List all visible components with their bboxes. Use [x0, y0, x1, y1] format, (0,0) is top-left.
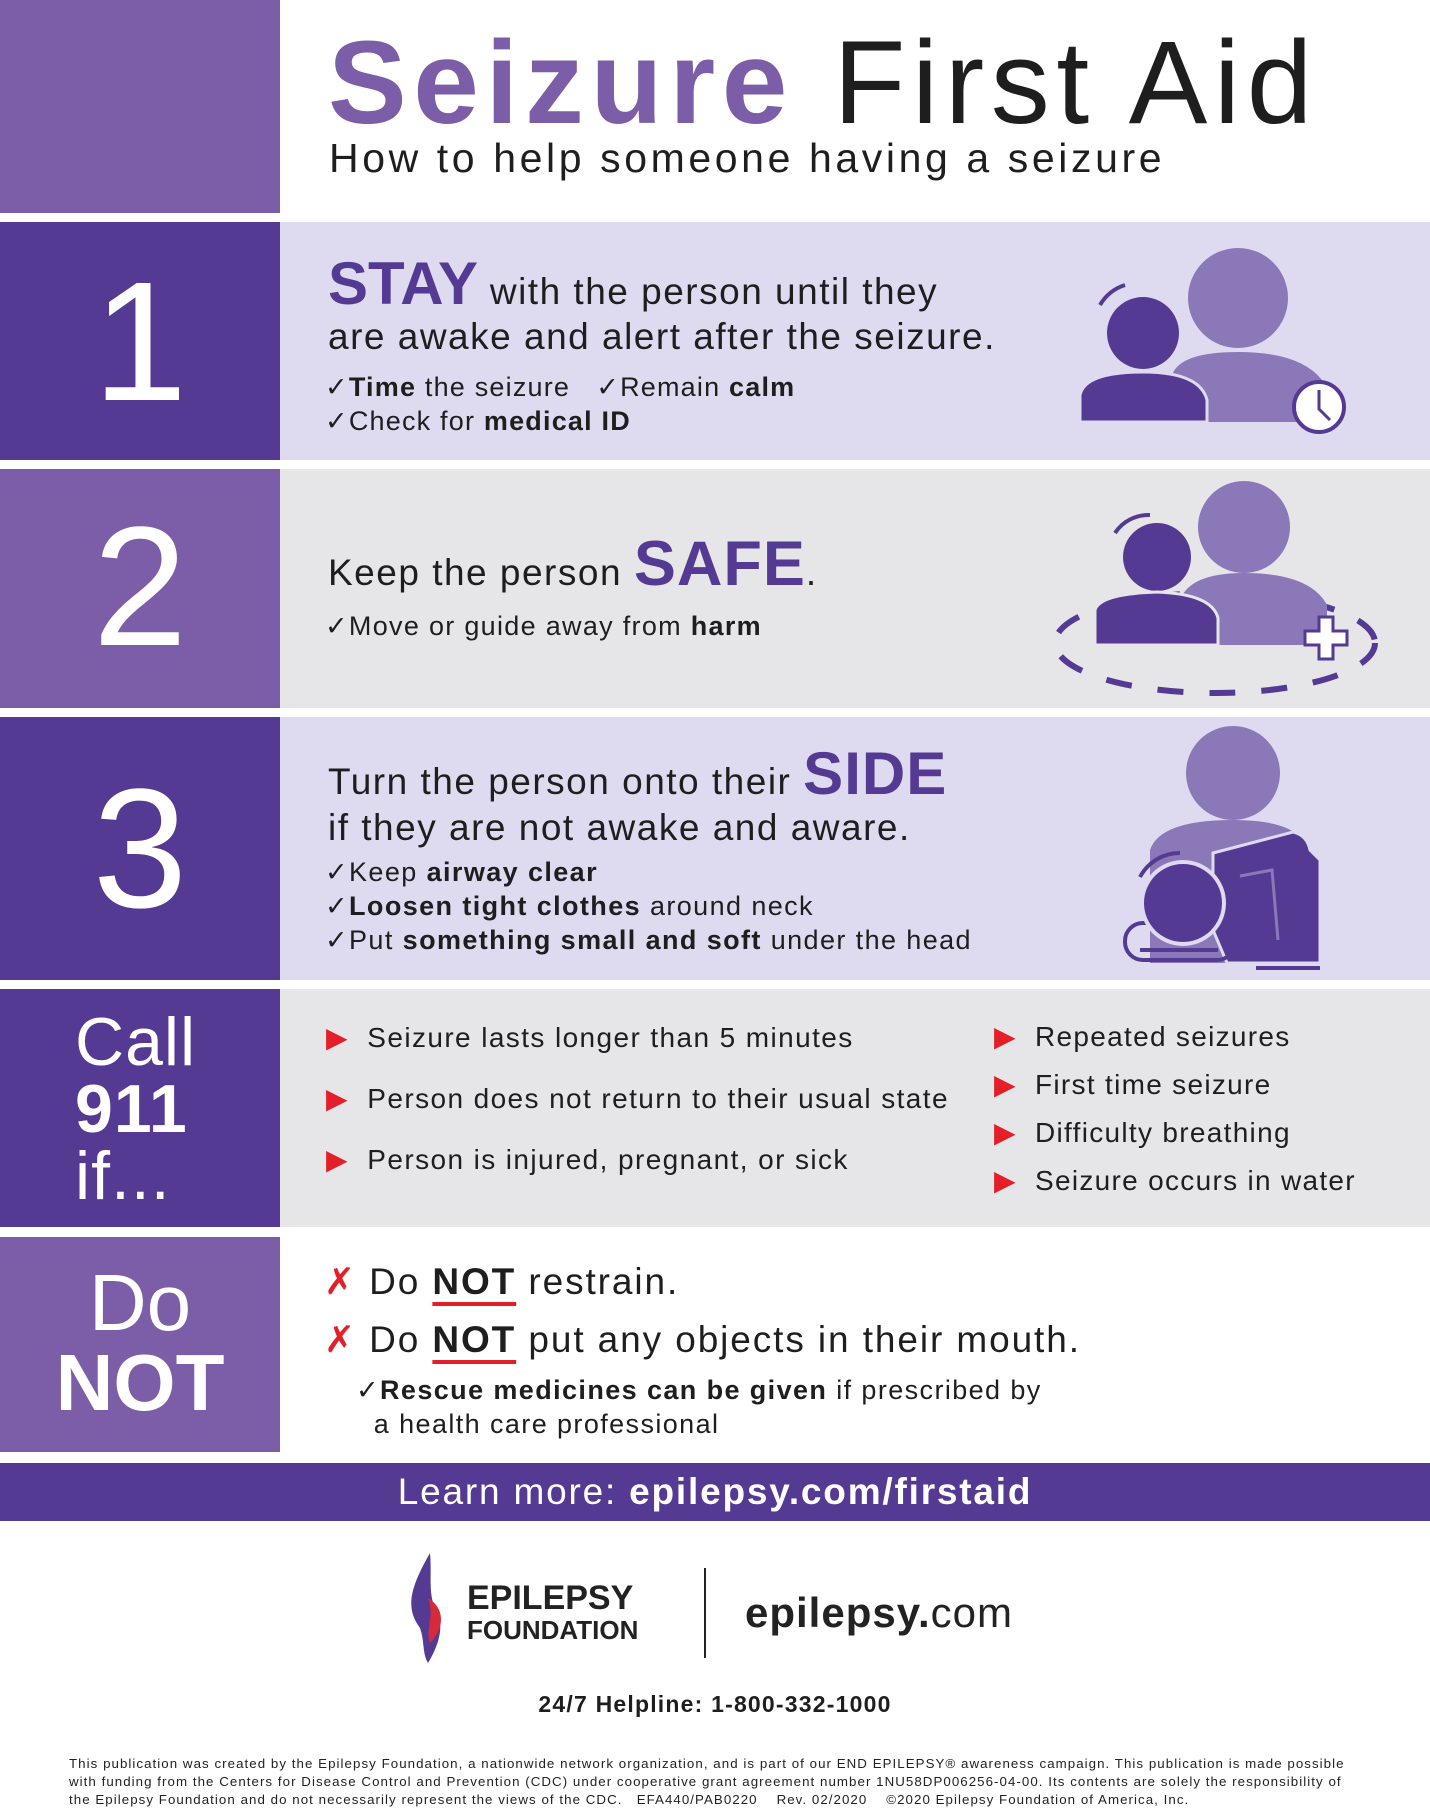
call 911 heading	[75, 1004, 196, 1214]
subtitle: How to help someone having a seizure	[329, 135, 1165, 181]
call 911 list right: ▶ First time seizure	[994, 1069, 1272, 1100]
step 1 checklist: ✓Check for medical ID	[325, 406, 631, 436]
icon: two people with clock	[1082, 248, 1346, 434]
panel: step 3	[0, 717, 1430, 980]
footer disclaimer: with funding from the Centers for Disease Control and Prevention (CDC) under cooperative grant agreement number 1NU58DP006256-04-00. Its contents are solely the responsibility of	[69, 1774, 1342, 1789]
step 2 text: Keep the person SAFE.	[328, 529, 818, 599]
call 911 list right: ▶ Repeated seizures	[994, 1021, 1291, 1052]
foundation wordmark	[467, 1579, 638, 1645]
do not items: ✗ Do NOT put any objects in their mouth.	[324, 1319, 1081, 1360]
step 3 checklist: ✓Loosen tight clothes around neck	[325, 891, 814, 921]
number 1: 1	[93, 247, 187, 437]
do not items	[324, 1261, 1081, 1364]
step 3 text	[328, 740, 947, 848]
icon: recovery position	[1123, 726, 1320, 970]
step 2 checklist: ✓Move or guide away from harm	[325, 611, 762, 641]
rescue medicines note: a health care professional	[374, 1409, 719, 1439]
step 3 text: if they are not awake and aware.	[328, 807, 911, 848]
call 911 list right	[994, 1021, 1356, 1196]
learn more bar: Learn more: epilepsy.com/firstaid	[398, 1471, 1032, 1512]
do not heading	[56, 1258, 224, 1427]
foundation wordmark: FOUNDATION	[467, 1615, 638, 1645]
call 911 list right: ▶ Difficulty breathing	[994, 1117, 1291, 1148]
number 3: 3	[93, 754, 187, 944]
step 3 checklist: ✓Put something small and soft under the head	[325, 925, 972, 955]
call 911 heading: Call	[75, 1004, 196, 1080]
footer disclaimer	[69, 1756, 1345, 1807]
call 911 list right: ▶ Seizure occurs in water	[994, 1165, 1356, 1196]
footer disclaimer: This publication was created by the Epilepsy Foundation, a nationwide network organization, and is part of our END EPILEPSY® awareness campaign. This publication is made possible	[69, 1756, 1345, 1771]
do not heading: Do	[89, 1258, 191, 1347]
learn more bar	[0, 1463, 1430, 1521]
rescue medicines note	[356, 1375, 1042, 1439]
panel: step 2	[0, 469, 1430, 708]
header purple block	[0, 0, 280, 213]
step 3 checklist: ✓Keep airway clear	[325, 857, 598, 887]
call 911 heading: if...	[75, 1138, 171, 1214]
icon: people in safe zone	[1056, 481, 1378, 696]
call 911 heading: 911	[75, 1071, 188, 1147]
do not items: ✗ Do NOT restrain.	[324, 1261, 679, 1302]
call 911 list left: ▶ Person is injured, pregnant, or sick	[326, 1144, 849, 1175]
call 911 list left	[326, 1022, 949, 1175]
website: epilepsy.com	[745, 1589, 1013, 1636]
call 911 list left: ▶ Person does not return to their usual state	[326, 1083, 949, 1114]
step 1 text: STAY with the person until they	[328, 250, 938, 317]
step 1 text: are awake and alert after the seizure.	[328, 316, 996, 357]
panel: do not	[0, 1237, 1081, 1452]
panel: step 1	[0, 222, 1430, 460]
panel: call 911	[0, 989, 1430, 1227]
call 911 list left: ▶ Seizure lasts longer than 5 minutes	[326, 1022, 854, 1053]
do not heading: NOT	[56, 1338, 224, 1427]
step 1 text	[328, 250, 996, 357]
footer disclaimer: the Epilepsy Foundation and do not necessarily represent the views of the CDC. EFA440/PAB0220 Rev. 02/2020 ©2020 Epilepsy Foundation of America, Inc.	[69, 1792, 1189, 1807]
foundation wordmark: EPILEPSY	[467, 1579, 633, 1617]
step 1 checklist: ✓Time the seizure ✓Remain calm	[325, 372, 795, 402]
icon: flame	[411, 1553, 441, 1663]
step 3 checklist	[325, 857, 972, 955]
rescue medicines note: ✓Rescue medicines can be given if prescribed by	[356, 1375, 1042, 1405]
number 2: 2	[93, 492, 187, 682]
step 1 checklist	[325, 372, 795, 436]
helpline: 24/7 Helpline: 1-800-332-1000	[538, 1691, 892, 1717]
logo: epilepsy foundation	[411, 1553, 1013, 1663]
step 3 text: Turn the person onto their SIDE	[328, 740, 947, 807]
title: Seizure First Aid	[328, 17, 1319, 149]
